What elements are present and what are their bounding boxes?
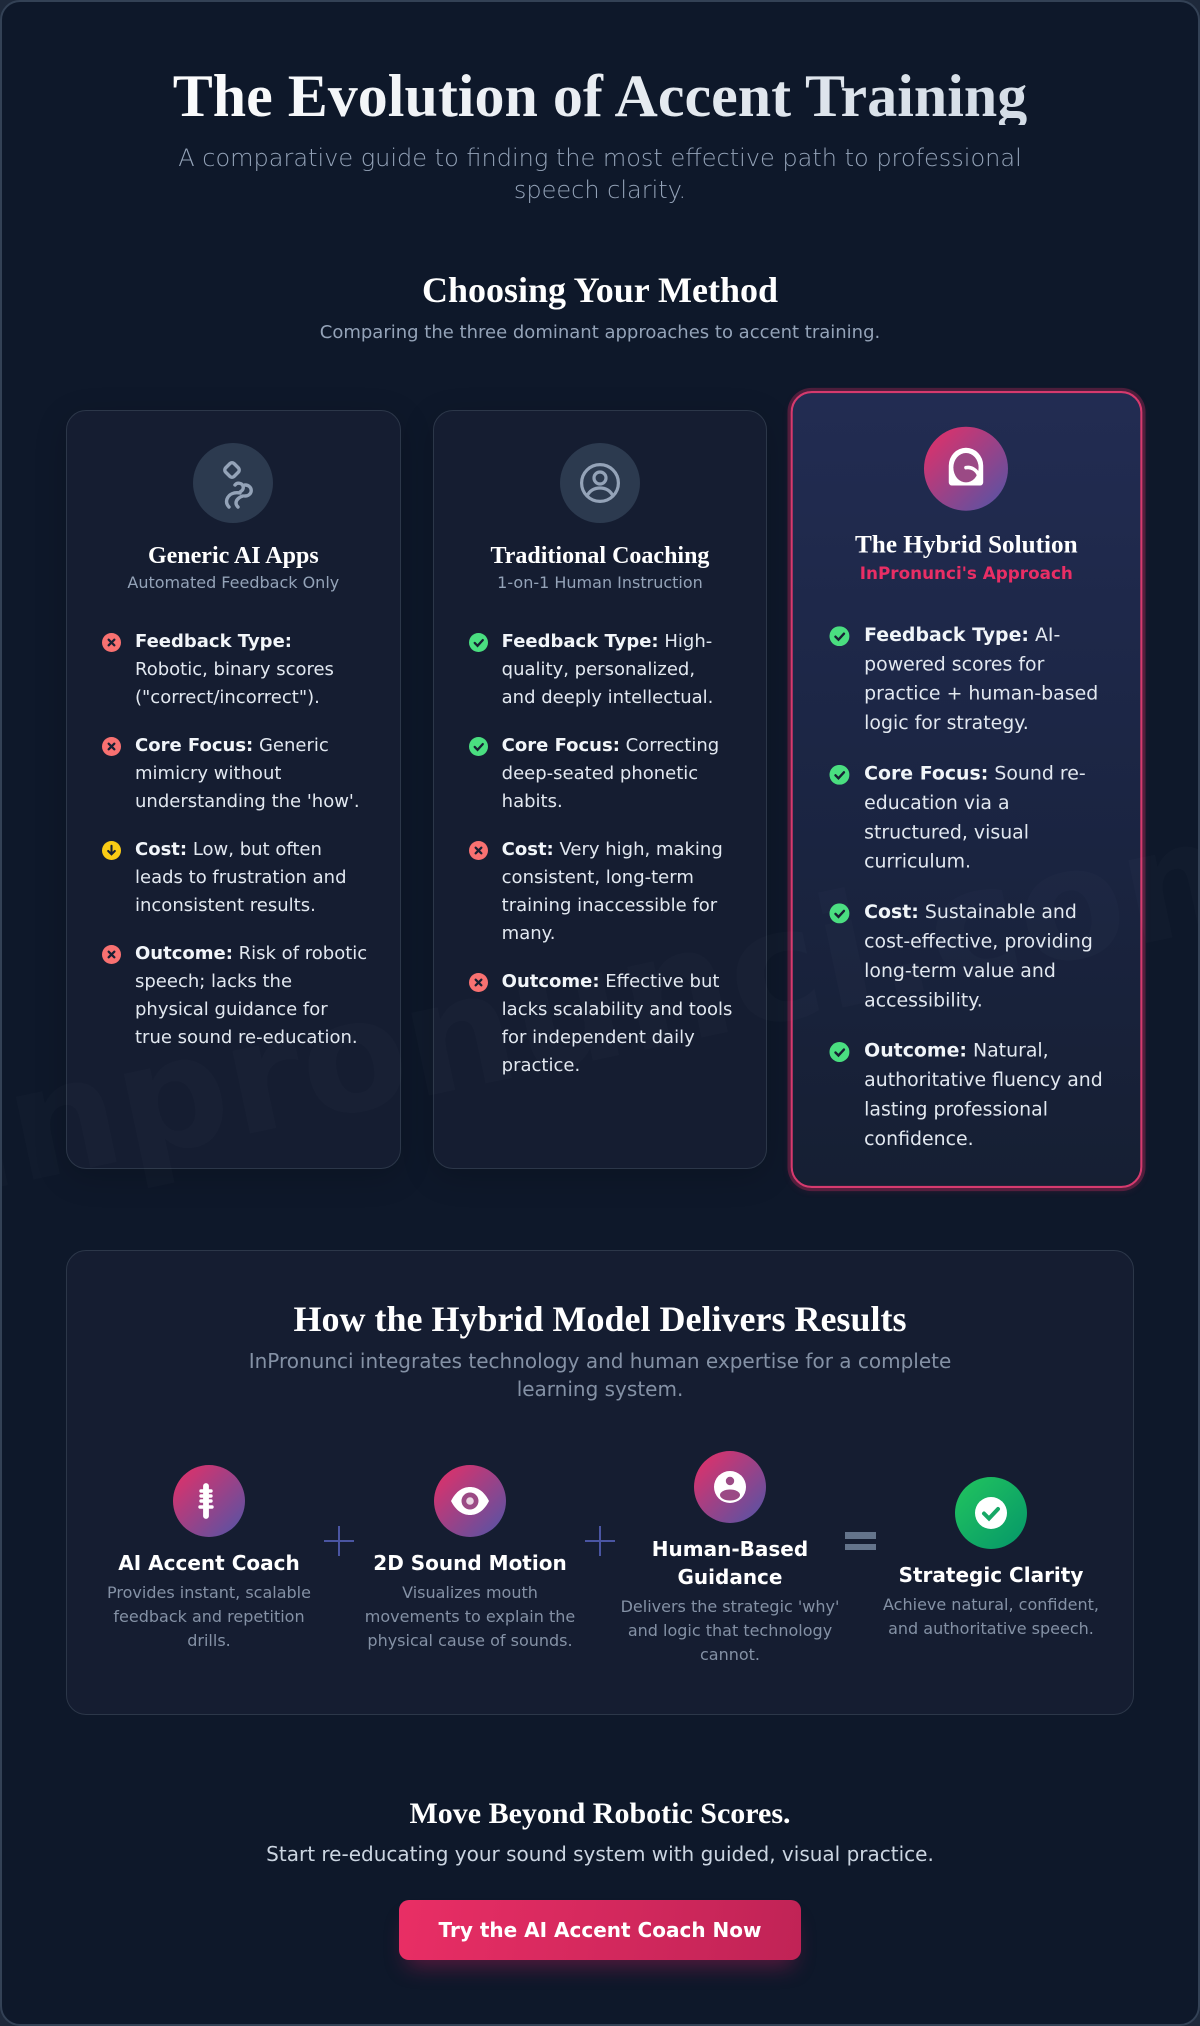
call-to-action heading: Move Beyond Robotic Scores. bbox=[409, 1797, 791, 1830]
call-to-action button bbox=[399, 1900, 801, 1960]
panel: generic AI apps bbox=[66, 410, 401, 1169]
step title: Human-Based bbox=[652, 1537, 808, 1561]
item: cost: Cost: Sustainable and bbox=[864, 901, 1077, 923]
step title: 2D Sound Motion bbox=[373, 1551, 567, 1575]
section subheading: Comparing the three dominant approaches to accent training. bbox=[320, 322, 880, 343]
item: core focus: education via a bbox=[864, 792, 1010, 814]
card subtitle: Automated Feedback Only bbox=[127, 573, 339, 592]
item: core focus: Core Focus: Generic bbox=[135, 735, 329, 756]
item: cost: long-term value and bbox=[864, 960, 1056, 982]
item: core focus: deep-seated phonetic bbox=[502, 763, 698, 784]
item: feedback type: powered scores for bbox=[864, 654, 1045, 676]
step description: feedback and repetition bbox=[113, 1607, 305, 1626]
step description: Achieve natural, confident, bbox=[883, 1595, 1099, 1614]
icon: microphone bbox=[173, 1465, 245, 1537]
step description: physical cause of sounds. bbox=[367, 1631, 573, 1650]
item: outcome: practice. bbox=[502, 1055, 580, 1076]
step description bbox=[107, 1583, 311, 1650]
item: outcome: Outcome: Effective but bbox=[502, 971, 719, 992]
item: cost bbox=[469, 839, 723, 944]
card subtitle: 1-on-1 Human Instruction bbox=[497, 573, 703, 592]
panel: the hybrid solution bbox=[791, 391, 1142, 1188]
step description: Provides instant, scalable bbox=[107, 1583, 311, 1602]
item: core focus bbox=[102, 735, 360, 812]
item: feedback type: quality, personalized, bbox=[502, 659, 695, 680]
feature list bbox=[469, 631, 732, 1076]
item: core focus: structured, visual bbox=[864, 822, 1029, 844]
step description bbox=[365, 1583, 575, 1650]
step: 2D sound motion bbox=[365, 1465, 575, 1650]
item: core focus: Core Focus: Correcting bbox=[502, 735, 719, 756]
item: outcome: for independent daily bbox=[502, 1027, 695, 1048]
step description: drills. bbox=[187, 1631, 231, 1650]
item: outcome bbox=[469, 971, 732, 1076]
item: core focus: understanding the 'how'. bbox=[135, 791, 360, 812]
item: feedback type: practice + human-based bbox=[864, 683, 1099, 705]
step title: AI Accent Coach bbox=[118, 1551, 300, 1575]
item: outcome: physical guidance for bbox=[135, 999, 328, 1020]
card subtitle: InPronunci's Approach bbox=[860, 563, 1073, 583]
card title: Generic AI Apps bbox=[148, 543, 319, 569]
icon: eye bbox=[434, 1465, 506, 1537]
icon: check bbox=[955, 1477, 1027, 1549]
step description: Delivers the strategic 'why' bbox=[621, 1597, 839, 1616]
step description bbox=[621, 1597, 839, 1664]
section description: InPronunci integrates technology and human expertise for a complete bbox=[249, 1349, 951, 1373]
step description: Visualizes mouth bbox=[402, 1583, 538, 1602]
card title: The Hybrid Solution bbox=[855, 531, 1078, 558]
item: outcome: true sound re-education. bbox=[135, 1027, 358, 1048]
call-to-action text: Start re-educating your sound system with guided, visual practice. bbox=[266, 1842, 934, 1866]
item: feedback type: Feedback Type: AI- bbox=[864, 624, 1061, 646]
item: outcome: speech; lacks the bbox=[135, 971, 292, 992]
step title: Strategic Clarity bbox=[899, 1563, 1083, 1587]
item: outcome: Outcome: Natural, bbox=[864, 1040, 1049, 1062]
step description: movements to explain the bbox=[365, 1607, 575, 1626]
item: feedback type: Feedback Type: High- bbox=[502, 631, 712, 652]
subtitle bbox=[178, 144, 1022, 204]
plus sign bbox=[585, 1526, 615, 1556]
item: core focus: Core Focus: Sound re- bbox=[864, 763, 1086, 785]
item: cost: inconsistent results. bbox=[135, 895, 316, 916]
item: core focus: curriculum. bbox=[864, 851, 971, 873]
section description: learning system. bbox=[517, 1377, 683, 1401]
item: outcome bbox=[830, 1040, 1103, 1150]
icon: person outline bbox=[560, 443, 640, 523]
item: outcome bbox=[102, 943, 367, 1048]
item: cost: Cost: Very high, making bbox=[502, 839, 723, 860]
panel: how the hybrid model delivers results bbox=[66, 1250, 1134, 1715]
item: outcome: authoritative fluency and bbox=[864, 1069, 1103, 1091]
item: cost: cost-effective, providing bbox=[864, 931, 1093, 953]
icon: headset bbox=[925, 427, 1009, 511]
icon: brain swirl bbox=[193, 443, 273, 523]
item: cost: training inaccessible for bbox=[502, 895, 717, 916]
item: cost: Cost: Low, but often bbox=[135, 839, 322, 860]
step description: cannot. bbox=[700, 1645, 760, 1664]
item: core focus: habits. bbox=[502, 791, 563, 812]
step title bbox=[652, 1537, 808, 1589]
item: core focus bbox=[830, 763, 1086, 873]
step: AI accent coach bbox=[107, 1465, 311, 1650]
item: cost: accessibility. bbox=[864, 990, 983, 1012]
step description: and authoritative speech. bbox=[888, 1619, 1094, 1638]
step: strategic clarity bbox=[883, 1477, 1099, 1638]
section heading: choosing your method: Choosing Your Method bbox=[422, 270, 778, 310]
item: core focus bbox=[469, 735, 719, 812]
plus sign bbox=[324, 1526, 354, 1556]
item: outcome: confidence. bbox=[864, 1128, 974, 1150]
item: feedback type: ("correct/incorrect"). bbox=[135, 687, 320, 708]
item: outcome: lacks scalability and tools bbox=[502, 999, 732, 1020]
feature list bbox=[830, 624, 1103, 1150]
step: human-based guidance bbox=[621, 1451, 839, 1664]
item: cost: many. bbox=[502, 923, 555, 944]
step title: Guidance bbox=[678, 1565, 782, 1589]
item: feedback type bbox=[469, 631, 713, 708]
item: outcome: lasting professional bbox=[864, 1099, 1048, 1121]
item: cost: consistent, long-term bbox=[502, 867, 694, 888]
item: cost bbox=[830, 901, 1093, 1012]
panel: traditional coaching bbox=[433, 410, 767, 1169]
item: feedback type: logic for strategy. bbox=[864, 712, 1029, 734]
card title: Traditional Coaching bbox=[491, 543, 709, 569]
item: feedback type bbox=[830, 624, 1099, 734]
item: feedback type: Feedback Type: bbox=[135, 631, 292, 652]
icon: person bbox=[694, 1451, 766, 1523]
section heading: hybrid model: How the Hybrid Model Delivers Results bbox=[294, 1299, 906, 1339]
item: feedback type: Robotic, binary scores bbox=[135, 659, 334, 680]
item: feedback type: and deeply intellectual. bbox=[502, 687, 713, 708]
equals sign bbox=[845, 1532, 876, 1550]
item: cost: leads to frustration and bbox=[135, 867, 346, 888]
step description bbox=[883, 1595, 1099, 1638]
item: outcome: Outcome: Risk of robotic bbox=[135, 943, 367, 964]
step description: and logic that technology bbox=[628, 1621, 832, 1640]
subtitle: speech clarity. bbox=[514, 176, 686, 204]
call-to-action button: Try the AI Accent Coach Now bbox=[439, 1918, 761, 1942]
item: core focus: mimicry without bbox=[135, 763, 281, 784]
item: cost bbox=[102, 839, 346, 916]
subtitle: A comparative guide to finding the most effective path to professional bbox=[178, 144, 1022, 172]
item: feedback type bbox=[102, 631, 334, 708]
feature list bbox=[102, 631, 367, 1048]
section description bbox=[249, 1349, 951, 1401]
